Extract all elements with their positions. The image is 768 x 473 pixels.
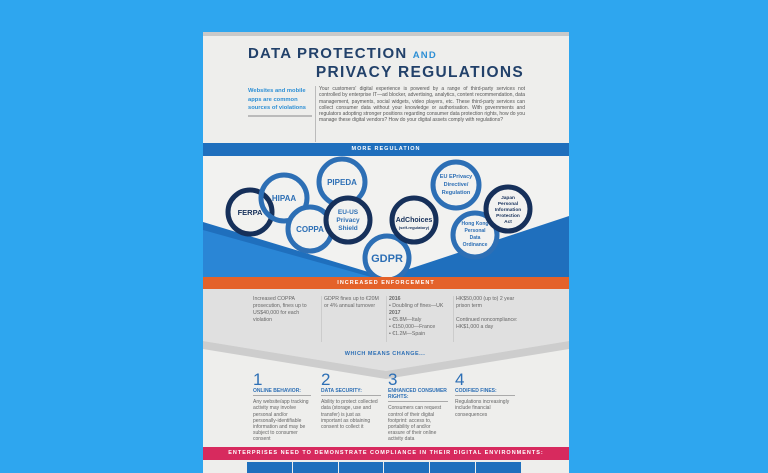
- circle: EU ePrivacy: EU EPrivacy: [440, 174, 473, 180]
- sidebar callout: [248, 87, 312, 117]
- circle: COPPA: COPPA: [296, 225, 324, 234]
- circle: EU-US: Privacy: [336, 217, 360, 224]
- enforcement facts: • €5.8M—Italy: [389, 317, 421, 323]
- change 2: DATA SECURITY:: [321, 388, 362, 394]
- change 3: Consumers can request control of their digital footprint: access to, portability of and/or erasure of their online activity data: [388, 405, 441, 442]
- circle: AdChoices: (self-regulatory): [399, 225, 430, 230]
- change 2: [321, 370, 381, 430]
- circle: HIPAA: [261, 175, 307, 221]
- change 1: 1: [253, 370, 262, 389]
- change 1: ONLINE BEHAVIOR:: [253, 388, 301, 394]
- circle: HIPAA: HIPAA: [272, 194, 296, 203]
- heading: which means change: WHICH MEANS CHANGE...: [345, 351, 425, 357]
- banner: enterprises: [203, 447, 569, 460]
- circle: PIPEDA: PIPEDA: [327, 178, 357, 187]
- circle: Hong Kong: [453, 213, 497, 257]
- title: PRIVACY REGULATIONS: [316, 64, 524, 81]
- enforcement facts: Increased COPPA prosecution, fines up to US$40,000 for each violation: [253, 296, 307, 323]
- circle: Japan: Personal: [498, 201, 518, 207]
- regulation map: [203, 156, 569, 277]
- intro text: [315, 86, 525, 142]
- intro text: Your customers' digital experience is powered by a range of third-party services not controlled by enterprise IT—ad blocker, advertising, analytics, content recommendation, data management, payments, social widgets, video players, etc. These third-party services can collect consumer data without your knowledge or authorisation. With governments and regulators adopting stronger positions regarding consumer data protection rights, how do you manage these digital vendors? How do your digital assets comply with regulations?: [319, 86, 525, 123]
- circle: Hong Kong: Data: [470, 235, 481, 241]
- circle: Hong Kong: Hong Kong: [462, 221, 488, 227]
- circle: GDPR: [365, 236, 409, 280]
- enforcement facts: 2017: [389, 310, 401, 316]
- circle: Hong Kong: Personal: [464, 228, 486, 234]
- circle: AdChoices: AdChoices: [396, 217, 432, 224]
- change 3: [388, 370, 448, 442]
- circle: Japan: Japan: [501, 195, 515, 201]
- circle: EU ePrivacy: [433, 162, 479, 208]
- circle: Japan: [486, 187, 530, 231]
- title: [248, 45, 524, 81]
- banner: increased enforcement: [203, 277, 569, 289]
- change 4: 4: [455, 370, 464, 389]
- change 2: Ability to protect collected data (storage, use and transfer) is just as important as obtaining consent to collect it: [321, 399, 378, 430]
- change 3: 3: [388, 370, 397, 389]
- change 4: [455, 370, 515, 418]
- enforcement facts: [253, 296, 517, 342]
- circle: Japan: Act: [504, 219, 512, 225]
- banner: increased enforcement: INCREASED ENFORCEMENT: [337, 280, 435, 286]
- enforcement facts: GDPR fines up to €20M or 4% annual turnover: [324, 296, 379, 309]
- circle: COPPA: [288, 207, 332, 251]
- change 3: ENHANCED CONSUMER RIGHTS:: [388, 388, 447, 400]
- changes columns: [253, 370, 515, 442]
- circle: GDPR: GDPR: [371, 253, 403, 265]
- paper sheet: [203, 32, 569, 473]
- change 4: Regulations increasingly include financial consequences: [455, 399, 509, 418]
- circle: EU-US: EU-US: [338, 209, 359, 216]
- top grey band: [203, 32, 569, 36]
- circle: EU-US: Shield: [338, 225, 358, 232]
- enforcement facts: • Doubling of fines—UK: [389, 303, 443, 309]
- circle: EU-US: [326, 198, 370, 242]
- change 2: 2: [321, 370, 330, 389]
- change 4: CODIFIED FINES:: [455, 388, 497, 394]
- circle: Japan: Information: [495, 207, 521, 213]
- chevron background: [203, 289, 569, 379]
- sidebar callout: Websites and mobile apps are common sources of violations: [248, 88, 306, 111]
- banner: enterprises: ENTERPRISES NEED TO DEMONSTRATE COMPLIANCE IN THEIR DIGITAL ENVIRONMENTS:: [228, 450, 544, 456]
- banner: more regulation: MORE REGULATION: [352, 146, 420, 152]
- circle: FERPA: FERPA: [238, 208, 263, 217]
- change 1: Any website/app tracking activity may involve personal and/or personally-identifiable information and may be subject to consumer consent: [253, 399, 309, 442]
- circle: FERPA: [228, 190, 272, 234]
- enforcement facts: • €1.2M—Spain: [389, 331, 425, 337]
- enforcement facts: 2016: [389, 296, 401, 302]
- icon row: [247, 462, 521, 473]
- circle: EU ePrivacy: Regulation: [442, 190, 471, 196]
- circle: EU ePrivacy: Directive/: [444, 182, 469, 188]
- circle: Japan: Protection: [496, 213, 520, 219]
- enforcement facts: • €150,000—France: [389, 324, 435, 330]
- banner: more regulation: [203, 143, 569, 156]
- enforcement facts: HK$50,000 (up to) 2 year prison term: [456, 296, 514, 309]
- circle: PIPEDA: [319, 159, 365, 205]
- enforcement facts: Continued noncompliance: HK$1,000 a day: [456, 317, 517, 330]
- circle: AdChoices: [392, 198, 436, 242]
- change 1: [253, 370, 311, 442]
- title: DATA PROTECTION AND: [248, 45, 437, 62]
- circle: Hong Kong: Ordinance: [463, 242, 488, 248]
